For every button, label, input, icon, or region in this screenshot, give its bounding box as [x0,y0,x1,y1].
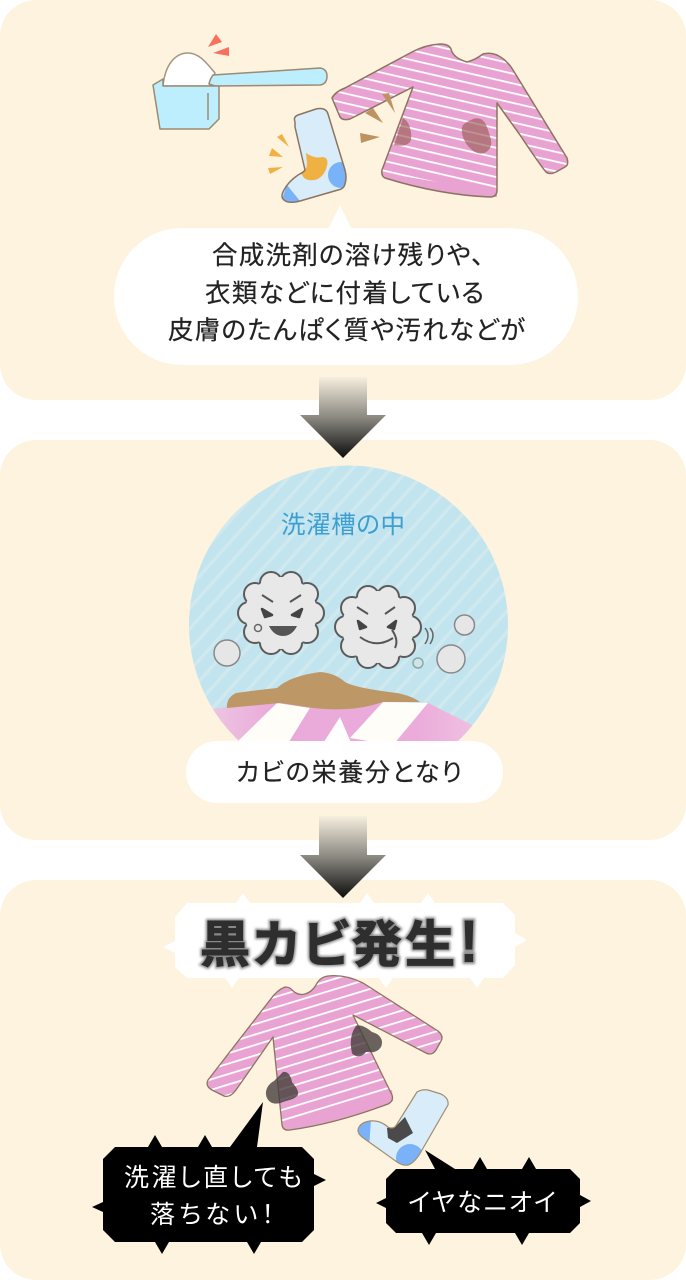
text: residue description: 衣類などに付着している [205,280,484,308]
text: black mold outbreak heading: ! [459,908,479,975]
text: residue description [168,242,525,345]
icon: moldy shirt [207,976,442,1130]
callout: residue speech bubble [114,205,578,365]
text: bad smell label: イヤなニオイ [408,1189,556,1217]
icon: grinning mold [238,572,324,654]
callout: black mold title burst [163,893,527,988]
text: black mold outbreak heading: 黒カビ発生 [200,917,455,973]
text: black mold outbreak heading: ! [459,908,479,975]
text: residue description: 皮膚のたんぱく質や汚れなどが [168,317,525,345]
text: won't come out even after rewashing: 洗濯し直しても [124,1164,302,1192]
callout: won't wash out [92,1102,326,1254]
icon: sock with yellow stain [268,108,347,203]
callout: mold nutrition bubble [186,717,503,803]
panel: inside washing tub [0,440,686,840]
text: won't come out even after rewashing [124,1164,302,1229]
icon: detergent scoop [153,34,327,129]
panel: black mold outbreak [0,880,686,1280]
text: won't come out even after rewashing: 落ちない！ [150,1201,274,1229]
icon: laundry and dirt pile [213,672,472,741]
icon: blowing mold [335,586,433,668]
arrow: down 1 [300,377,386,458]
panel: cause [0,0,686,400]
text: black mold outbreak heading: 黒カビ発生 [200,917,455,973]
icon: striped shirt with stains [332,44,568,197]
text: tub label: 洗濯槽の中 [281,511,405,539]
icon: mold spores [214,615,474,673]
text: residue description: 合成洗剤の溶け残りや、 [212,242,484,270]
icon: moldy sock [357,1089,449,1166]
illustration: tub circle [189,466,508,741]
text: becomes mold nutrition: カビの栄養分となり [236,759,462,787]
callout: bad smell [376,1150,591,1245]
arrow: down 2 [300,816,386,898]
